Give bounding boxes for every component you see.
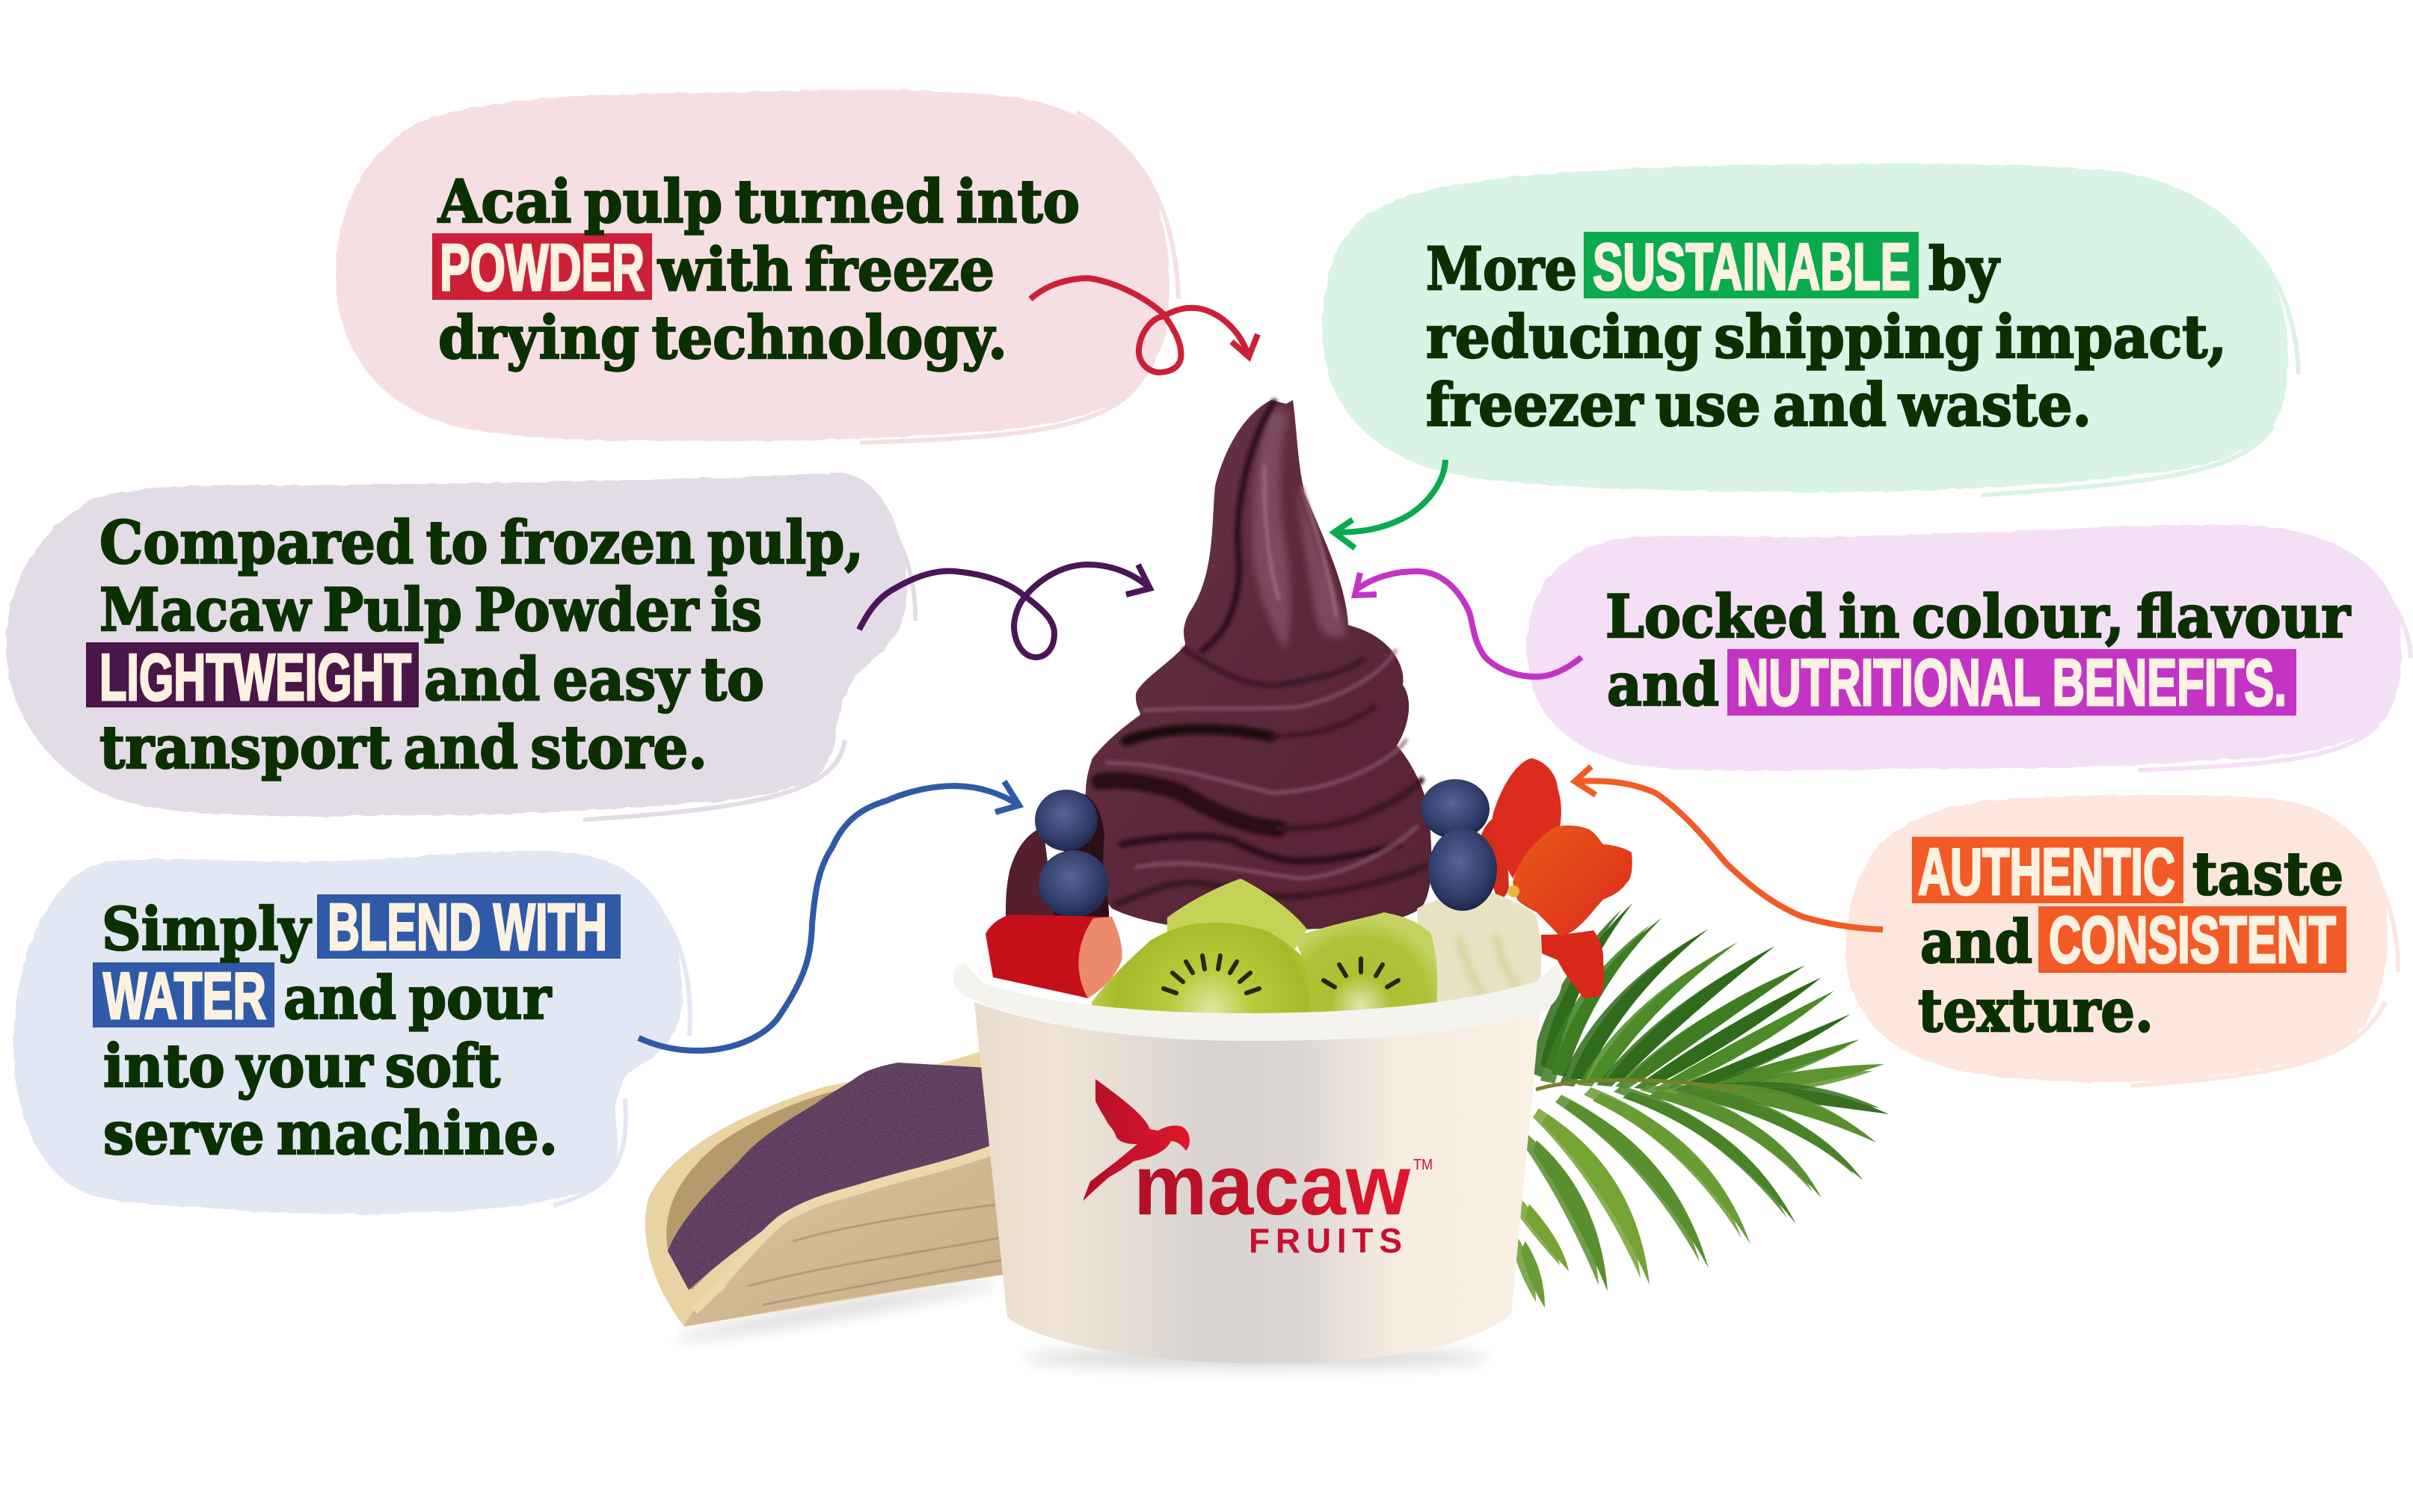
highlight: SUSTAINABLE <box>1584 232 1919 298</box>
text: blend with word: BLEND WITH <box>328 890 607 964</box>
illustration: acai soft serve swirl <box>1082 400 1431 932</box>
panel: sustainable <box>1322 164 2299 495</box>
brush stroke: muted purple <box>583 474 915 820</box>
scoop front rim <box>694 1146 1003 1310</box>
text: with freeze: with freeze <box>657 235 995 304</box>
blueberry 2 <box>1039 850 1109 918</box>
highlight: LIGHTWEIGHT <box>86 642 419 707</box>
brush stroke: blue <box>553 894 690 1205</box>
panel: authentic taste <box>1845 795 2398 1086</box>
text: transport and store: transport and store. <box>99 713 707 782</box>
scoop rim <box>645 1051 1006 1327</box>
bubble: orange <box>1845 795 2388 1082</box>
illustration: cup <box>953 963 1562 1367</box>
text: drying technology: drying technology. <box>438 303 1007 372</box>
arrow: purple <box>859 565 1150 657</box>
scoop inner <box>666 1077 972 1290</box>
kiwi back slice <box>1166 879 1307 987</box>
brush stroke: pink <box>860 112 1178 443</box>
strawberry <box>986 915 1122 998</box>
text: locked in colour flavour: Locked in colour, flavour <box>1605 582 2351 651</box>
text: compared to frozen pulp: Compared to frozen pulp, <box>99 508 864 577</box>
text: taste: taste <box>2192 839 2343 909</box>
petal lower <box>1541 930 1604 998</box>
palm stem <box>1536 1080 1738 1090</box>
banana slice <box>1417 891 1541 1011</box>
kiwi small slice <box>1293 912 1437 1014</box>
swirl grooves <box>1099 402 1427 904</box>
panel: nutritional benefits <box>1527 525 2411 771</box>
highlight: CONSISTENT <box>2038 906 2346 973</box>
bubble: blue <box>13 850 682 1214</box>
panel: lightweight <box>6 473 915 820</box>
illustration: wooden scoop with powder <box>645 1051 1006 1345</box>
arrow: green <box>1334 460 1445 548</box>
illustration: toppings <box>986 779 1541 1014</box>
text: lightweight word: LIGHTWEIGHT <box>99 640 411 714</box>
text: and: and <box>1607 650 1719 719</box>
arrow: blue <box>639 781 1019 1051</box>
cup shadow <box>1024 1349 1488 1367</box>
blueberry 3 <box>1421 779 1490 839</box>
bubble: magenta <box>1527 525 2402 771</box>
text: and pour: and pour <box>283 963 552 1033</box>
text: more: More <box>1426 234 1577 304</box>
highlight: POWDER <box>432 233 652 300</box>
powder <box>668 1063 991 1290</box>
arrow: orange <box>1575 766 1883 929</box>
logo: parrot <box>1083 1079 1190 1201</box>
highlight: AUTHENTIC <box>1912 837 2183 903</box>
bubble: green <box>1322 164 2288 492</box>
panel: blend with water <box>13 850 690 1214</box>
kiwi seeds <box>1164 956 1398 993</box>
text: into your soft: into your soft <box>103 1031 500 1101</box>
logo: tm mark: TM <box>1413 1157 1433 1173</box>
cone right light stripe <box>1297 479 1346 638</box>
text: texture: texture. <box>1918 976 2154 1045</box>
illustration: palm leaf <box>1512 903 1889 1308</box>
text: reducing shipping impact: reducing shipping impact, <box>1426 302 2227 372</box>
logo: macaw fruits <box>1083 1079 1433 1260</box>
petal top <box>1492 758 1561 879</box>
highlight: NUTRITIONAL BENEFITS <box>1727 649 2296 716</box>
text: simply: Simply <box>102 894 312 964</box>
kiwi big slice <box>1092 923 1335 1014</box>
palm leaflets upper <box>1540 903 1884 1090</box>
text: and easy to: and easy to <box>424 645 764 714</box>
blueberry 1 <box>1035 790 1098 851</box>
banana shading <box>1458 935 1518 998</box>
cup body <box>974 1002 1540 1363</box>
brush stroke: orange <box>2131 823 2398 1086</box>
palm leaflets upper second row <box>1529 909 1873 1097</box>
flower center <box>1507 885 1519 897</box>
brush stroke: green <box>1982 187 2299 495</box>
illustration: flower <box>1481 758 1632 998</box>
panel: powder freeze drying <box>336 90 1178 443</box>
cup rim <box>953 963 1562 1041</box>
text: acai pulp: Acai pulp turned into <box>437 167 1080 236</box>
palm leaflets lower <box>1521 1087 1889 1308</box>
bubble: muted purple <box>6 473 906 816</box>
swirl body <box>1082 400 1431 932</box>
cone light stripes <box>1252 404 1291 651</box>
dark gap behind berries <box>1047 793 1109 927</box>
text: macaw pulp powder is: Macaw Pulp Powder is <box>99 575 762 645</box>
highlight: BLEND WITH <box>317 894 621 959</box>
text: sustainable word: SUSTAINABLE <box>1593 230 1911 304</box>
highlight: WATER <box>93 962 274 1027</box>
palm leaflets lower second row <box>1512 1081 1880 1302</box>
strawberry flesh <box>1078 917 1122 998</box>
petal right <box>1513 826 1632 936</box>
text: freezer use and waste: freezer use and waste. <box>1426 370 2091 440</box>
logo: fruits word: FRUITS <box>1249 1221 1402 1260</box>
bubble: pink <box>336 90 1169 441</box>
arrow: magenta <box>1355 571 1581 677</box>
text: serve machine: serve machine. <box>103 1098 558 1168</box>
text: and: and <box>1920 907 2032 977</box>
text: water word: WATER <box>103 959 266 1033</box>
raspberry back <box>1006 826 1054 916</box>
text: by: by <box>1928 234 2000 304</box>
arrow: red <box>1030 278 1258 372</box>
brush stroke: magenta <box>2139 532 2411 770</box>
text: powder word: POWDER <box>440 230 645 304</box>
scoop front <box>684 1143 1006 1327</box>
blueberry 4 <box>1428 829 1497 911</box>
logo: macaw word: macaw <box>1134 1138 1410 1233</box>
text: authentic word: AUTHENTIC <box>1918 835 2175 909</box>
scoop shadow <box>674 1275 1000 1345</box>
petal left <box>1481 818 1509 905</box>
scoop wood grain <box>748 1204 1002 1305</box>
